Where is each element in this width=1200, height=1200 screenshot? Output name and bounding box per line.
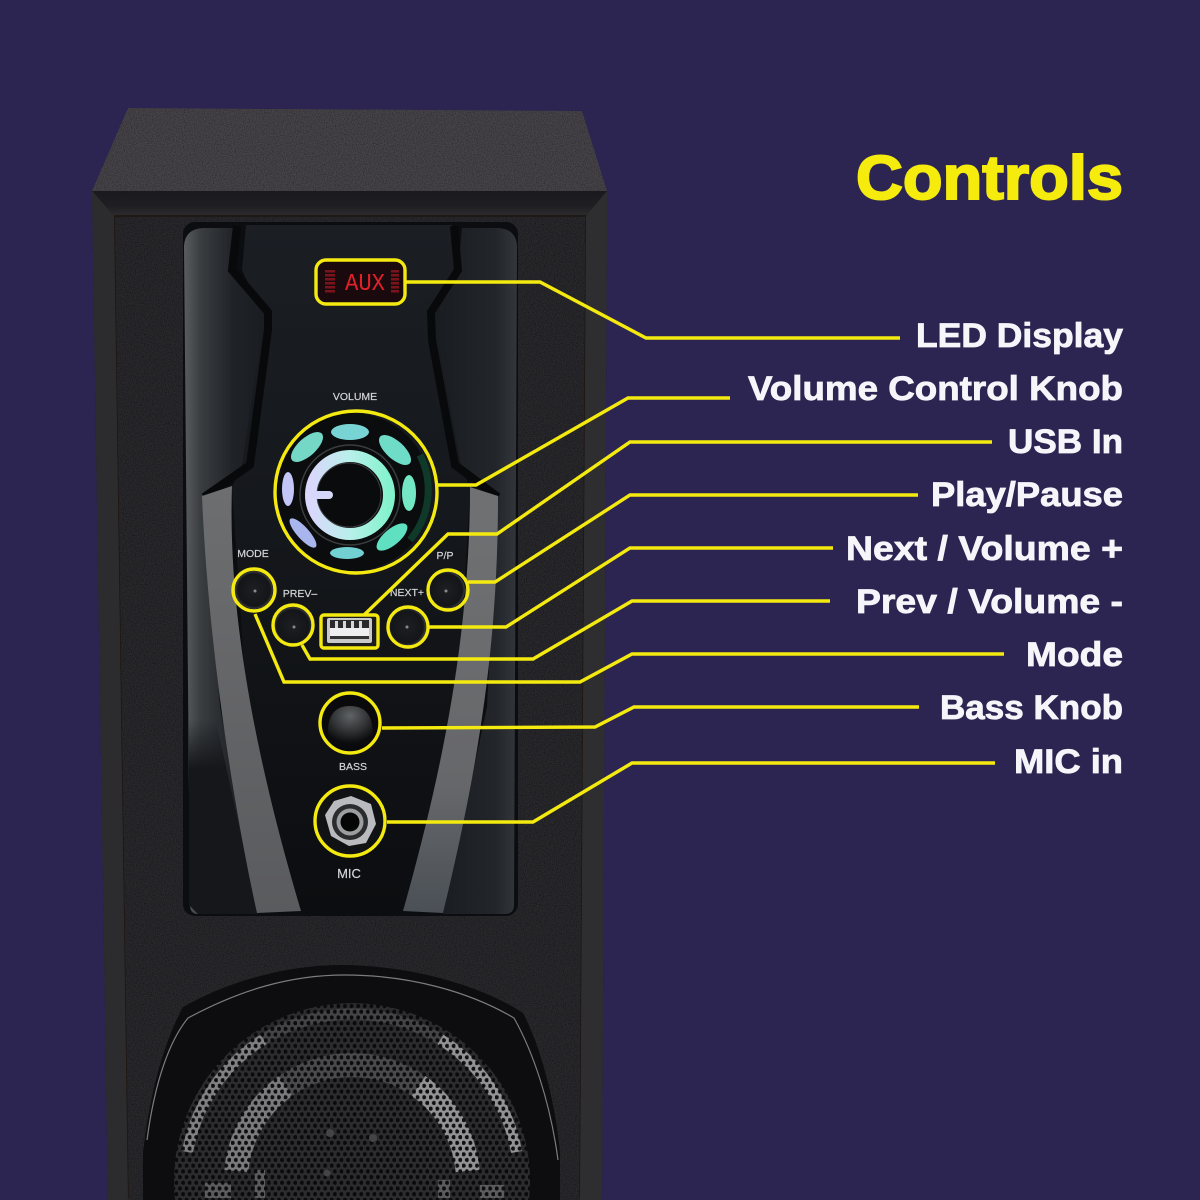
top bevel band [92,191,607,216]
dial body [273,413,431,571]
surround highlight [147,975,558,1160]
glowing ring [311,456,389,534]
ring bezel [300,445,400,545]
callout markers and leader lines [233,260,1004,856]
next button [388,587,426,646]
label list [748,317,1123,781]
USB port [322,615,377,648]
panel recess [183,222,518,916]
centre logo marks [324,1129,377,1176]
LED display [317,261,405,304]
volume label: VOLUME [333,391,377,403]
label: volume control knob: Volume Control Knob [748,370,1123,408]
bass label: BASS [339,761,367,773]
panel left gloss [184,228,268,914]
left side strip [92,191,128,1200]
green glow [410,455,428,540]
lower left shadow [189,720,258,914]
mic label: MIC [337,866,361,881]
label: play pause: Play/Pause [931,476,1123,514]
speaker driver [143,965,560,1200]
led display leader [316,260,900,338]
prev button: PREV– [283,588,317,600]
bass highlight [328,706,373,745]
next leader [388,548,833,647]
bass dome [321,694,379,752]
cabinet top face [92,108,607,191]
label: usb in: USB In [1008,423,1123,461]
inner light ring [236,1065,468,1171]
prev button [274,588,317,645]
small buttons [235,548,465,646]
mode button [235,548,273,609]
usb leader [321,442,992,648]
outer light ring [188,1014,516,1152]
jack plate [316,788,384,856]
left red bars [325,270,335,292]
knob centre [317,463,381,527]
play pause button [427,550,465,609]
right groove [431,226,498,497]
label: led display: LED Display [916,317,1123,355]
label: bass knob: Bass Knob [940,689,1123,727]
label: mic in: MIC in [1014,743,1123,781]
driver surround [143,965,560,1200]
cabinet front face [92,191,607,1200]
label: mode: Mode [1026,636,1123,674]
right side strip [580,191,607,1200]
port shell [327,618,372,643]
left groove [204,226,268,497]
label: next volume up: Next / Volume + [846,530,1123,568]
panel right gloss [430,228,517,914]
right red bars [391,270,399,292]
port contacts [335,621,362,628]
bass knob [321,694,379,773]
mic leader [315,763,995,856]
inner frame line [114,216,586,1198]
play pause button: P/P [437,550,453,562]
next button: NEXT+ [390,587,424,599]
mode button: MODE [237,548,269,560]
grille [174,1003,530,1200]
jack ring [336,808,364,836]
knob indicator [312,491,333,499]
bass leader [320,693,919,753]
panel centre [232,225,470,912]
light petals [282,424,416,559]
jack collar [332,804,368,840]
right grey swoosh [403,487,498,913]
mic jack [316,788,384,881]
label: prev volume down: Prev / Volume - [856,583,1123,621]
display window [317,261,405,304]
jack nut [325,796,376,846]
lower grille patches [205,1170,504,1198]
prev leader [273,601,830,659]
control panel [183,222,518,916]
jack hole [340,812,360,832]
port housing [322,615,377,648]
volume knob leader [275,398,730,573]
volume knob [273,391,431,571]
port slot [330,620,369,628]
port tongue [330,628,369,636]
speaker cabinet [92,108,607,1200]
mode leader [233,569,1004,682]
title: Controls [856,144,1123,213]
port lower gap [330,636,369,639]
display reading: AUX [345,271,385,298]
play pause leader [428,495,918,610]
left grey swoosh [202,486,301,913]
